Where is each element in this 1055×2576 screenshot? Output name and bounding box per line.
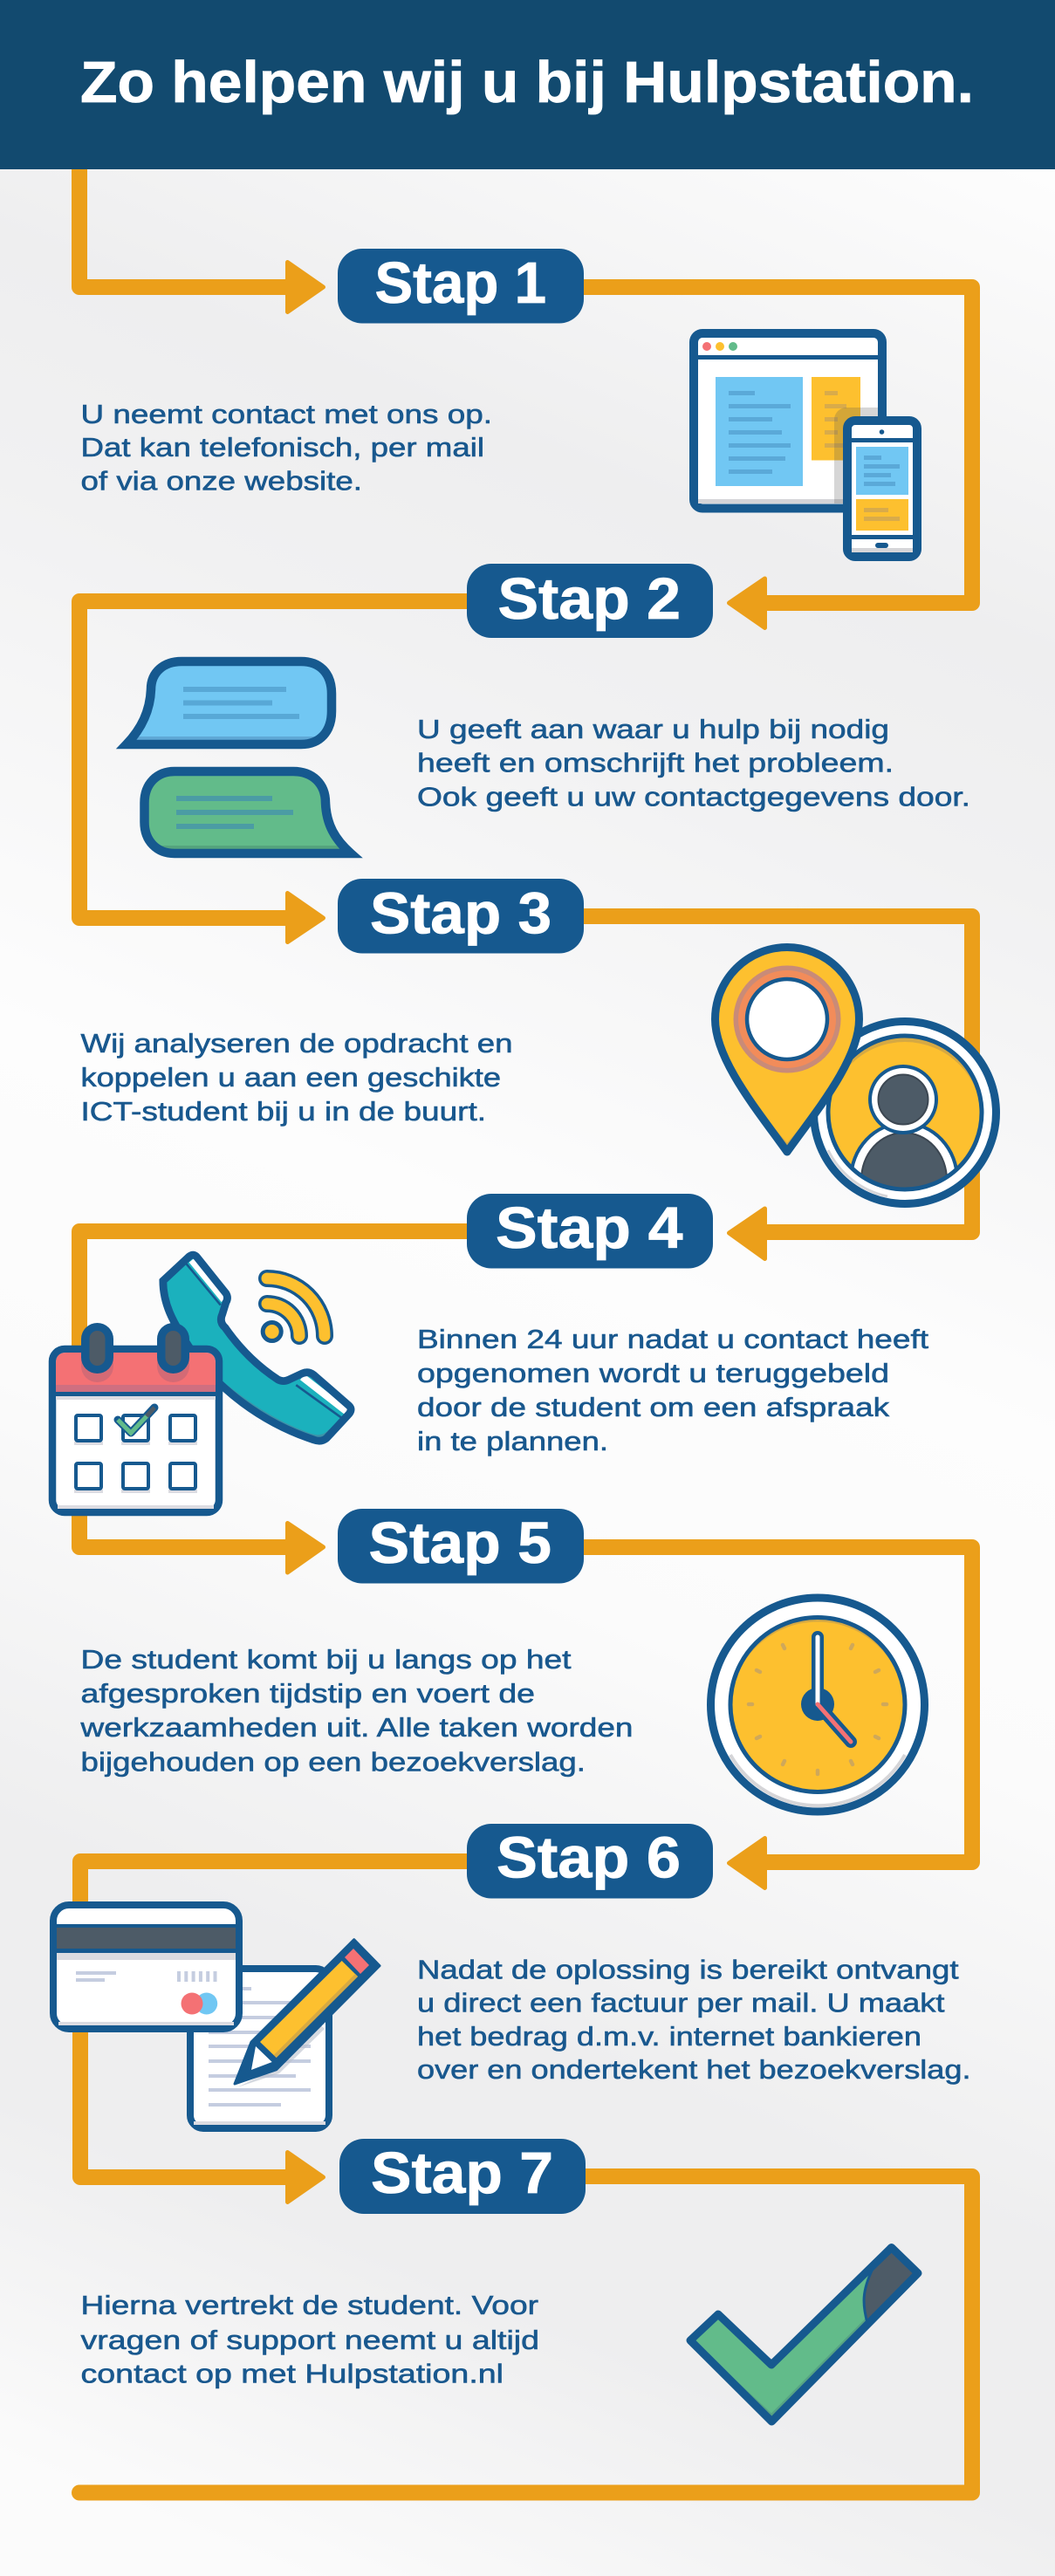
map pin xyxy=(716,948,859,1152)
step 1 badge xyxy=(338,249,584,323)
step 5 text: werkzaamheden uit. Alle taken worden xyxy=(79,1712,634,1743)
step 5 text: De student komt bij u langs op het xyxy=(80,1644,572,1675)
green speech bubble xyxy=(140,771,353,854)
step 5 text xyxy=(79,1644,634,1777)
step 5 badge: Stap 5 xyxy=(368,1511,551,1576)
step 7 badge xyxy=(339,2139,586,2214)
step 5 text: bijgehouden op een bezoekverslag. xyxy=(80,1747,586,1777)
step 3 text xyxy=(80,1028,513,1127)
person in circle xyxy=(813,1021,997,1238)
step 4 badge: Stap 4 xyxy=(496,1196,682,1261)
icon: telephone, signal and calendar xyxy=(52,1255,351,1512)
step 5 text: afgesproken tijdstip en voert de xyxy=(80,1678,535,1709)
arrow: to step 1 xyxy=(288,262,323,312)
step 4 text: opgenomen wordt u teruggebeld xyxy=(417,1358,889,1388)
step 1 text: U neemt contact met ons op. xyxy=(80,399,492,429)
step 1 text xyxy=(80,399,492,496)
pencil xyxy=(235,1940,380,2087)
step 4 badge xyxy=(467,1194,713,1269)
signal waves xyxy=(263,1278,325,1340)
step 1 badge: Stap 1 xyxy=(375,250,546,316)
icon: bank card, document and pencil xyxy=(53,1905,380,2128)
step 4 text: Binnen 24 uur nadat u contact heeft xyxy=(417,1324,928,1354)
step 3 text: ICT-student bij u in de buurt. xyxy=(80,1096,486,1127)
blue speech bubble xyxy=(122,661,336,745)
step 6 text: over en ondertekent het bezoekverslag. xyxy=(417,2054,970,2085)
step 3 badge: Stap 3 xyxy=(370,881,551,946)
step 7 text: contact op met Hulpstation.nl xyxy=(80,2358,504,2389)
step 6 badge xyxy=(467,1824,713,1899)
arrow: to step 6 xyxy=(730,1838,764,1888)
icon: location pin and person xyxy=(716,948,997,1238)
arrow: to step 3 xyxy=(288,894,323,942)
icon: clock xyxy=(710,1598,925,1812)
bank card xyxy=(53,1905,239,2029)
step 4 text: in te plannen. xyxy=(417,1426,608,1456)
document xyxy=(190,1969,329,2128)
step 3 text: koppelen u aan een geschikte xyxy=(80,1062,501,1093)
step 3 text: Wij analyseren de opdracht en xyxy=(80,1028,513,1058)
step 1 text: of via onze website. xyxy=(80,466,362,496)
step 6 text xyxy=(417,1955,970,2085)
icon: chat bubbles xyxy=(122,661,353,854)
step 6 badge: Stap 6 xyxy=(497,1826,681,1890)
flow connector lines xyxy=(79,169,972,2492)
icon: green check mark xyxy=(690,2248,918,2422)
step 7 text: Hierna vertrekt de student. Voor xyxy=(80,2290,538,2320)
arrow: to step 5 xyxy=(288,1524,323,1572)
telephone handset xyxy=(163,1255,351,1441)
step 1 text: Dat kan telefonisch, per mail xyxy=(80,432,484,462)
step 7 text: vragen of support neemt u altijd xyxy=(80,2325,539,2355)
step 5 badge xyxy=(338,1509,584,1583)
icon: website on tablet and phone xyxy=(694,333,917,557)
step 4 text xyxy=(417,1324,928,1456)
step 2 text: Ook geeft u uw contactgegevens door. xyxy=(417,782,970,812)
step 4 text: door de student om een afspraak xyxy=(417,1392,890,1422)
step 6 text: het bedrag d.m.v. internet bankieren xyxy=(417,2021,921,2052)
step 7 text xyxy=(80,2290,539,2389)
step 6 text: u direct een factuur per mail. U maakt xyxy=(417,1988,945,2018)
arrow: to step 4 xyxy=(730,1209,764,1258)
title: Zo helpen wij u bij Hulpstation. xyxy=(80,50,974,115)
step 2 badge: Stap 2 xyxy=(497,566,681,632)
step 7 badge: Stap 7 xyxy=(371,2141,553,2206)
step 2 badge xyxy=(467,564,713,638)
header band xyxy=(0,0,1055,169)
arrow: to step 2 xyxy=(730,579,764,628)
step 6 text: Nadat de oplossing is bereikt ontvangt xyxy=(417,1955,959,1984)
step 2 text: U geeft aan waar u hulp bij nodig xyxy=(417,714,889,744)
step 2 text: heeft en omschrijft het probleem. xyxy=(417,747,894,778)
arrow: to step 7 xyxy=(288,2152,323,2203)
step 3 badge xyxy=(338,879,584,953)
step 2 text xyxy=(417,714,970,812)
calendar xyxy=(52,1323,219,1512)
